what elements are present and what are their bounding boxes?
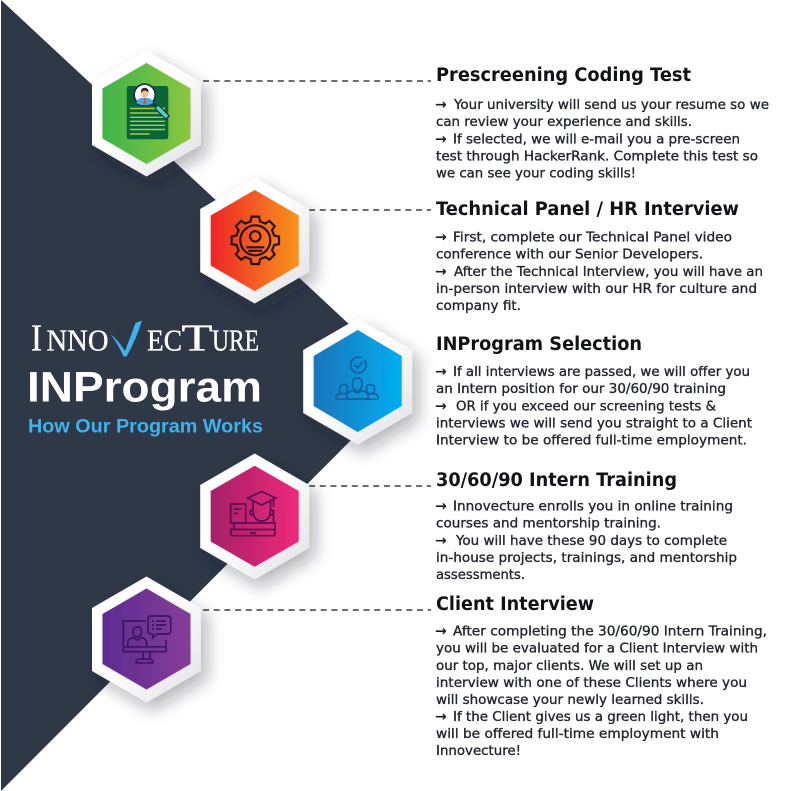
text block: →: [435, 533, 447, 549]
text block: You will have these 90 days to complete: [455, 534, 727, 549]
icon: gear with person: [232, 217, 279, 264]
text block: courses and mentorship training.: [436, 517, 661, 532]
text block: If the Client gives us a green light, then you: [453, 710, 748, 725]
text block: in-person interview with our HR for culture and: [436, 282, 757, 297]
text block: interviews we will send you straight to a Client: [436, 417, 752, 432]
panel: Client Interview: [435, 594, 767, 759]
text block: If all interviews are passed, we will offer you: [453, 365, 750, 380]
text block: →: [435, 364, 447, 380]
text block: →: [435, 132, 447, 148]
panel: Technical Panel / HR Interview: [435, 199, 763, 314]
text block: we can see your coding skills!: [436, 166, 636, 182]
logo: Innovecture wordmark: I: [31, 318, 42, 360]
hexagon: step 1 resume: [92, 50, 201, 176]
text block: [435, 97, 769, 182]
text block: After the Technical Interview, you will have an: [454, 265, 763, 280]
text block: Interview to be offered full-time employment.: [436, 434, 747, 449]
heading: Prescreening Coding Test: [436, 65, 691, 86]
icon: team with check mark: [336, 357, 378, 399]
text block: can review your experience and skills.: [436, 115, 692, 130]
text block: interview with one of these Clients where you: [436, 676, 747, 691]
panel: 30/60/90 Intern Training: [435, 470, 737, 583]
text block: →: [435, 264, 447, 280]
text block: [435, 364, 752, 449]
text block: [435, 230, 763, 314]
hexagon: step 4 graduate: [200, 454, 309, 580]
heading: Technical Panel / HR Interview: [436, 199, 739, 220]
text block: our top, major clients. We will set up an: [436, 659, 703, 674]
logo: Innovecture wordmark: T: [182, 318, 212, 360]
logo: Innovecture wordmark: EC: [147, 322, 182, 358]
text block: company fit.: [436, 299, 521, 314]
title: INProgram: [27, 364, 262, 412]
icon: resume with magnifier: [127, 84, 168, 139]
text block: →: [435, 709, 447, 725]
connector: step 2: [309, 209, 431, 211]
panel: INProgram Selection: [435, 334, 752, 449]
icon: video call monitor: [123, 616, 171, 663]
text block: If selected, we will e-mail you a pre-screen: [453, 132, 740, 148]
text block: →: [435, 399, 447, 415]
dark background arrow shape: [1, 0, 410, 791]
icon: graduate at laptop: [231, 492, 276, 536]
logo: Innovecture wordmark: NNO: [46, 322, 108, 358]
text block: Innovecture!: [436, 744, 521, 759]
text block: →: [435, 499, 447, 515]
logo: Innovecture wordmark: URE: [212, 322, 259, 358]
text block: Your university will send us your resume so we: [453, 98, 769, 113]
text block: test through HackerRank. Complete this test so: [436, 150, 758, 164]
text block: →: [435, 97, 447, 113]
text block: conference with our Senior Developers.: [436, 248, 703, 263]
text block: [435, 624, 767, 759]
text block: OR if you exceed our screening tests &: [456, 400, 716, 415]
text block: you will be evaluated for a Client Interview with: [436, 642, 758, 657]
hexagon: step 2 gear: [200, 178, 309, 304]
text block: [435, 499, 737, 583]
subtitle: How Our Program Works: [28, 417, 263, 438]
text block: First, complete our Technical Panel video: [453, 231, 732, 246]
logo: blue V swoosh: [110, 320, 142, 356]
text block: will showcase your newly learned skills.: [436, 693, 704, 708]
text block: assessments.: [436, 568, 525, 583]
panel: Prescreening Coding Test: [435, 65, 769, 182]
heading: Client Interview: [436, 594, 594, 615]
text block: Innovecture enrolls you in online training: [453, 500, 733, 515]
connector: step 4: [309, 485, 431, 487]
text block: →: [435, 624, 447, 640]
text block: After completing the 30/60/90 Intern Training,: [453, 625, 767, 640]
text block: →: [435, 230, 447, 246]
text block: in-house projects, trainings, and mentorship: [436, 551, 737, 566]
logo: Innovecture wordmark: [31, 318, 259, 360]
connector: step 5: [203, 609, 431, 611]
hexagon: step 3 team: [303, 318, 412, 444]
text block: an Intern position for our 30/60/90 training: [436, 382, 726, 397]
connector: step 1: [203, 80, 431, 82]
text block: will be offered full-time employment with: [436, 727, 719, 742]
heading: 30/60/90 Intern Training: [436, 470, 677, 491]
hexagon: step 5 video interview: [92, 576, 201, 702]
heading: INProgram Selection: [436, 334, 642, 355]
